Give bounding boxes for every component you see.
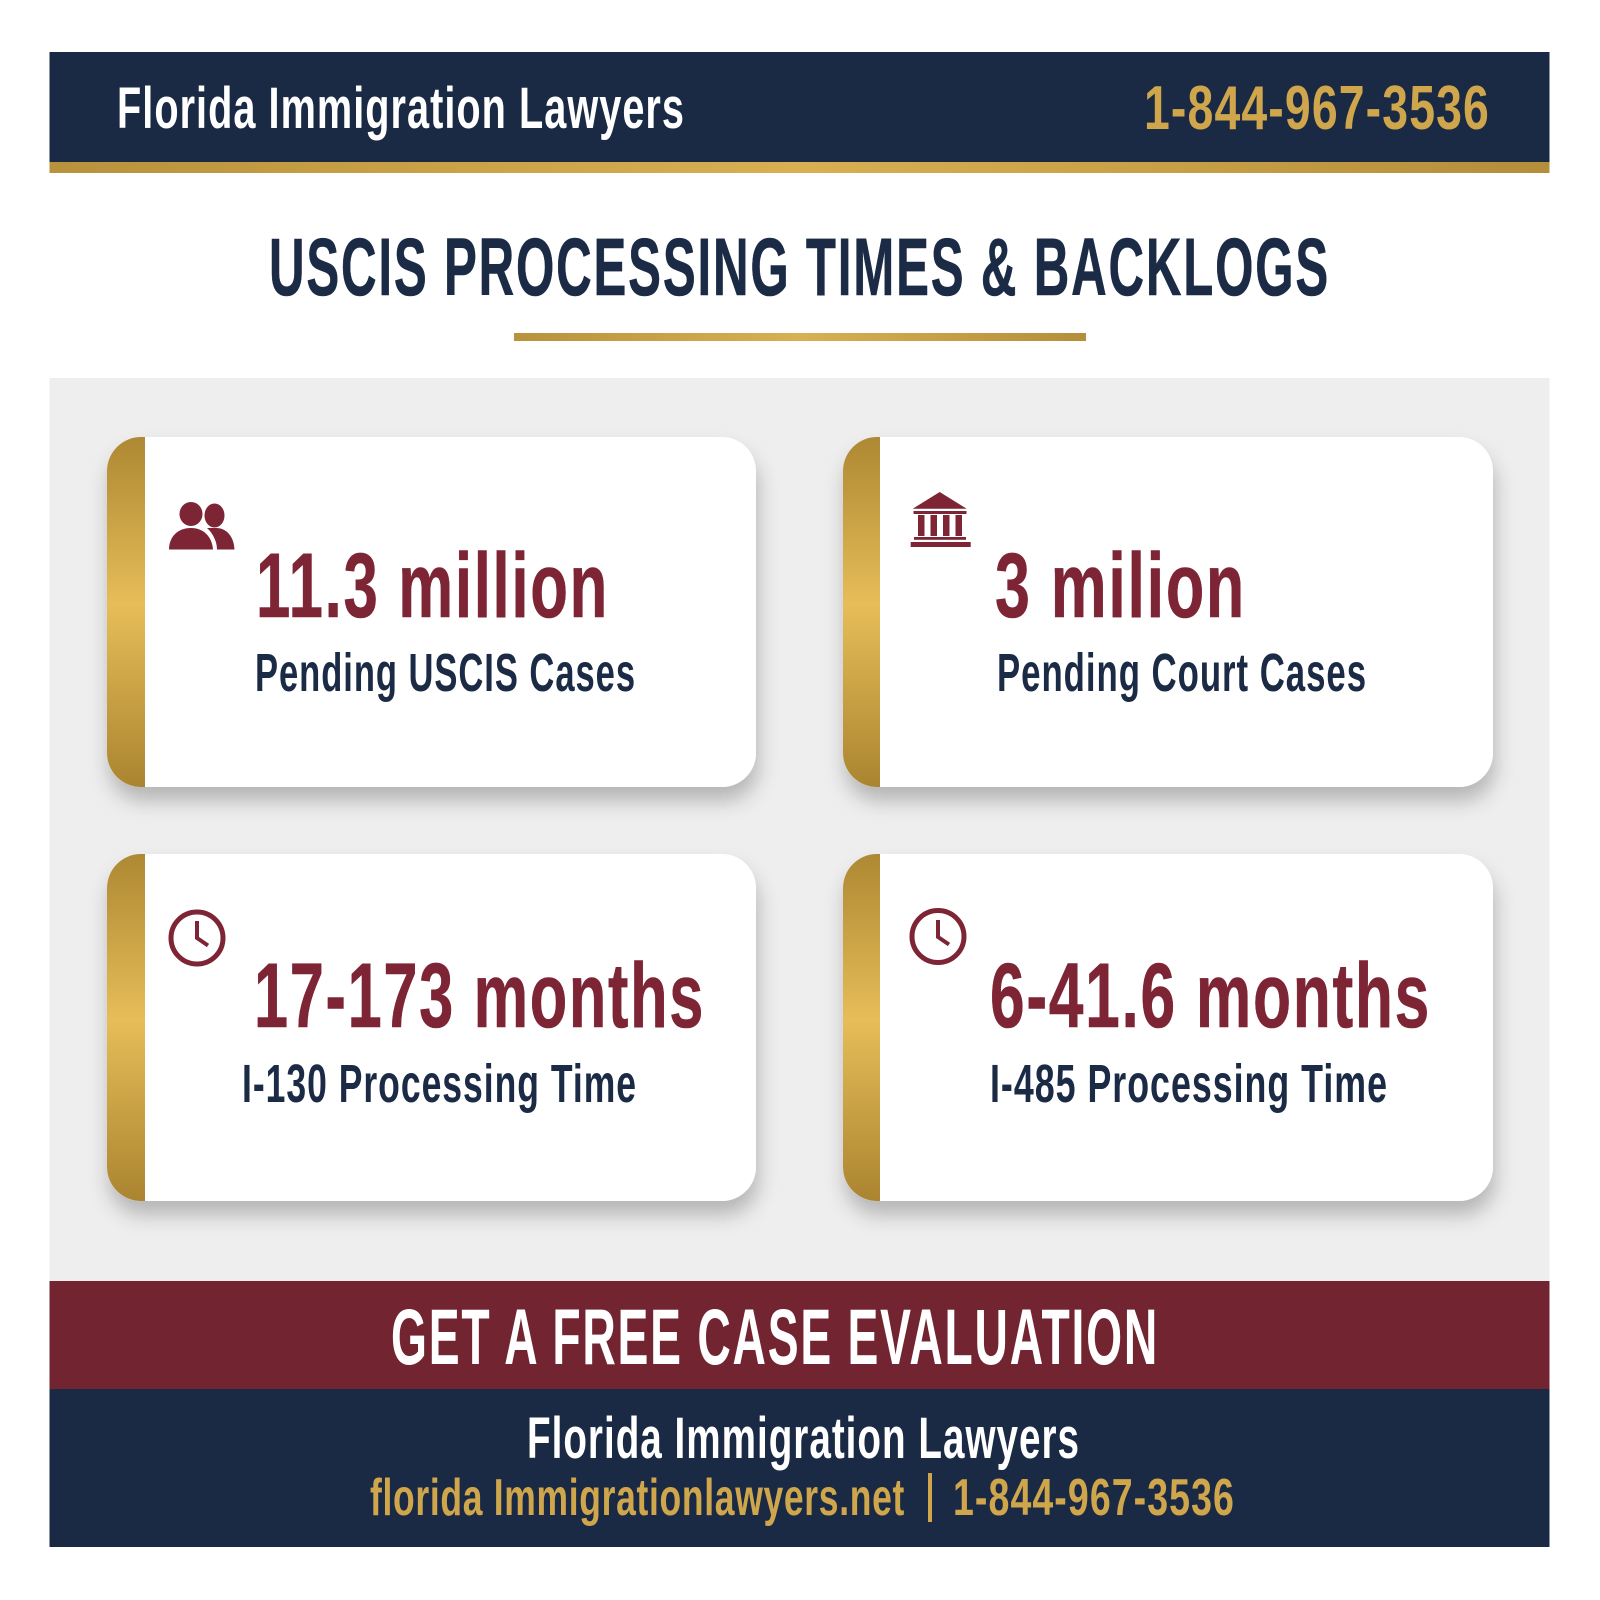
statistic value: 11.3 million (256, 535, 609, 637)
statistic label: Pending Court Cases (997, 643, 1367, 703)
website: florida Immigrationlawyers.net (370, 1469, 905, 1527)
statistic label: Pending USCIS Cases (255, 643, 636, 703)
statistic value: 3 milion (995, 535, 1246, 637)
statistic label: I-130 Processing Time (242, 1054, 637, 1114)
footer phone number: 1-844-967-3536 (953, 1469, 1235, 1527)
statistic value: 17-173 months (254, 945, 705, 1047)
title underline (514, 333, 1086, 341)
icon: people (169, 502, 234, 550)
firm name: Florida Immigration Lawyers (117, 76, 685, 141)
phone number: 1-844-967-3536 (1144, 74, 1490, 143)
footer contact panel (50, 1389, 1550, 1547)
card: pending USCIS cases (107, 437, 756, 787)
header banner (50, 52, 1550, 173)
icon: clock (912, 910, 964, 962)
icon: courthouse (911, 492, 971, 547)
card: I-485 processing time (843, 854, 1493, 1201)
card: pending court cases (843, 437, 1493, 787)
icon: clock (171, 912, 223, 964)
call to action banner (50, 1281, 1550, 1389)
panel: statistics background (50, 378, 1550, 1281)
divider (928, 1473, 932, 1522)
statistic label: I-485 Processing Time (990, 1054, 1388, 1114)
card: I-130 processing time (107, 854, 756, 1201)
footer firm name: Florida Immigration Lawyers (527, 1406, 1080, 1471)
